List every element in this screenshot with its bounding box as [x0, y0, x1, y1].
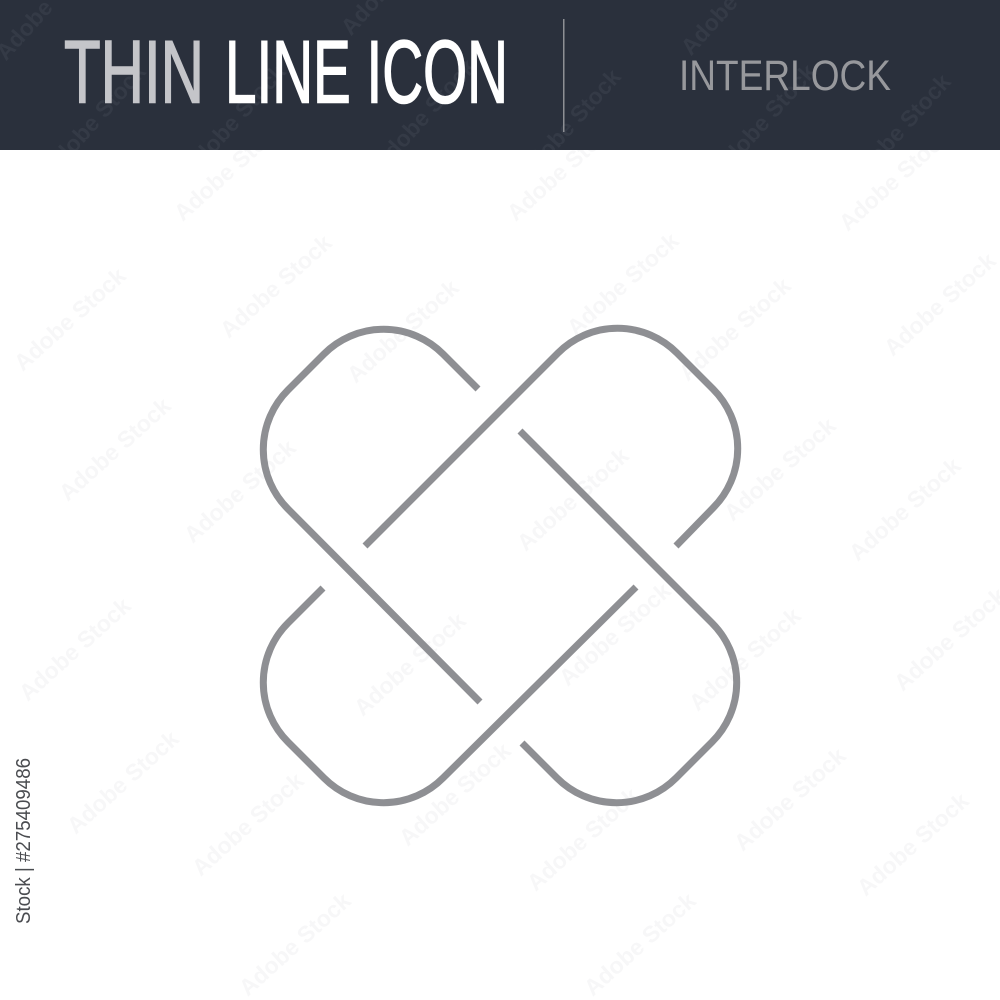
- watermark pattern: Adobe Stock: [62, 725, 184, 839]
- header watermark: [0, 0, 956, 806]
- watermark pattern: Adobe Stock: [729, 742, 851, 856]
- header watermark: Adobe Stock: [177, 59, 291, 181]
- title: thin line icon: LINE ICON: [225, 22, 508, 122]
- icon band: top-right lobe: [365, 328, 738, 546]
- stock id side text: Stock | #275409486: [13, 758, 35, 924]
- watermark pattern: Adobe Stock: [844, 452, 966, 566]
- watermark pattern: Adobe Stock: [554, 577, 676, 691]
- title: thin line icon: [64, 22, 508, 122]
- header watermark: Adobe Stock: [367, 54, 481, 176]
- watermark pattern: Adobe Stock: [562, 227, 684, 341]
- watermark pattern: Adobe Stock: [502, 112, 624, 226]
- icon band: top-left lobe: [263, 329, 480, 702]
- watermark pattern: Adobe Stock: [349, 607, 471, 721]
- watermark pattern: Adobe Stock: [512, 442, 634, 556]
- watermark pattern: Adobe Stock: [215, 229, 337, 343]
- watermark pattern: Adobe Stock: [54, 392, 176, 506]
- watermark pattern: Adobe Stock: [169, 112, 291, 226]
- icon band: bottom-left lobe: [263, 587, 636, 803]
- header watermark: Adobe Stock: [707, 59, 821, 181]
- watermark pattern: Adobe Stock: [394, 737, 516, 851]
- watermark pattern: Adobe Stock: [579, 887, 701, 1000]
- watermark pattern: Adobe Stock: [879, 247, 1000, 361]
- watermark pattern: Adobe Stock: [179, 434, 301, 548]
- header divider: [563, 19, 564, 132]
- icon: interlock: [263, 328, 738, 803]
- watermark pattern: Adobe Stock: [684, 602, 806, 716]
- watermark pattern: Adobe Stock: [674, 272, 796, 386]
- watermark pattern: Adobe Stock: [834, 122, 956, 236]
- watermark pattern: Adobe Stock: [14, 592, 136, 706]
- header watermark: Adobe Stock: [512, 64, 626, 186]
- title: thin line icon: THIN: [64, 22, 204, 122]
- header watermark: Adobe Stock: [37, 59, 151, 181]
- icon band: bottom-right lobe: [520, 431, 737, 803]
- subtitle: interlock: INTERLOCK: [679, 52, 891, 100]
- watermark pattern: Adobe Stock: [9, 262, 131, 376]
- watermark pattern: Adobe Stock: [234, 887, 356, 1000]
- watermark pattern: Adobe Stock: [719, 412, 841, 526]
- watermark pattern: Adobe Stock: [852, 787, 974, 901]
- watermark pattern: Adobe Stock: [522, 782, 644, 896]
- watermark pattern: Adobe Stock: [187, 767, 309, 881]
- watermark pattern: Adobe Stock: [342, 274, 464, 388]
- header watermark: Adobe Stock: [842, 69, 956, 191]
- header bar: [0, 0, 1000, 191]
